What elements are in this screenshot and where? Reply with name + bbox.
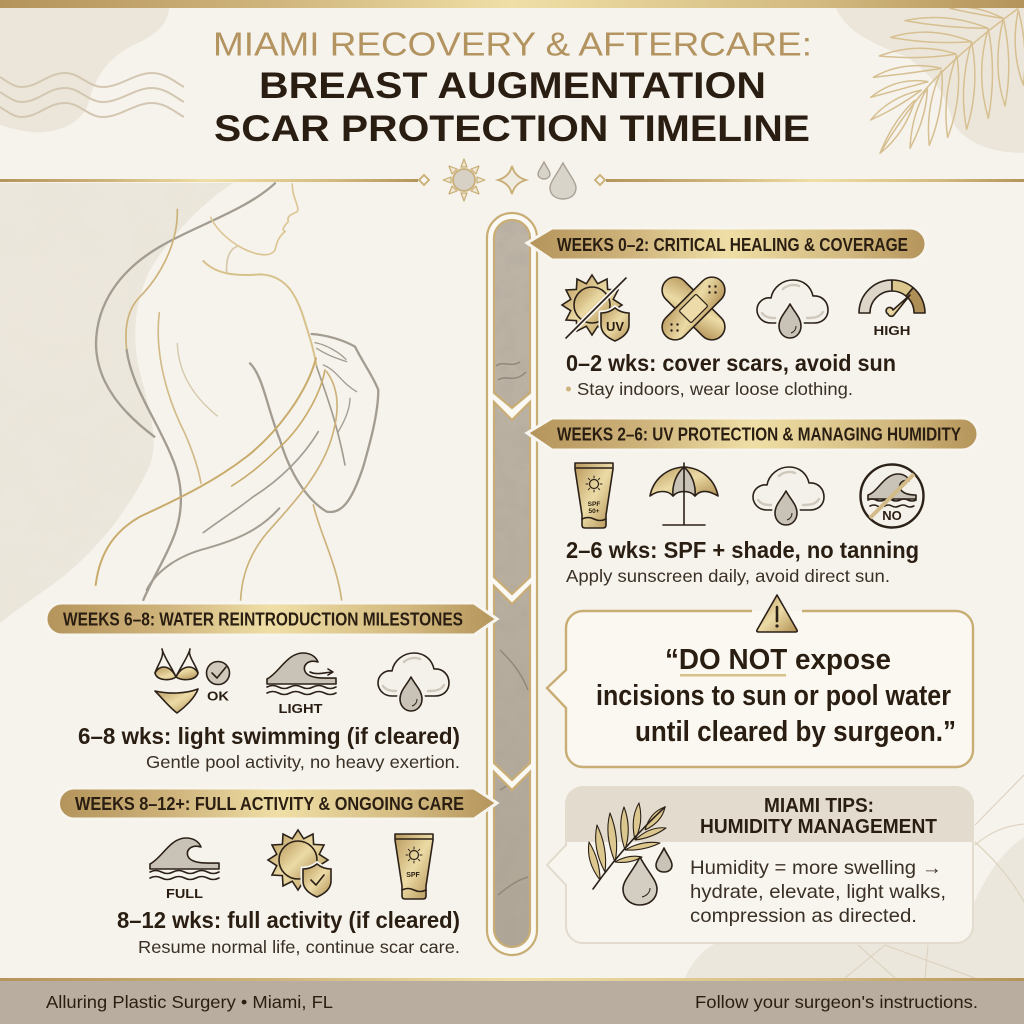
title: [213, 26, 812, 149]
icon: sunscreen tube SPF 50+: SPF: [588, 501, 600, 508]
icon: no tanning / no swimming: NO: [882, 508, 902, 523]
icon: sun with UV shield: [562, 275, 629, 341]
quote text: until cleared by surgeon.”: [635, 716, 956, 748]
banner: weeks 8-12: [58, 788, 497, 819]
bottom right background shape: [685, 775, 1024, 978]
tips text: compression as directed.: [690, 905, 917, 927]
top gold bar: [0, 0, 1024, 8]
icon: humidity cloud: [757, 280, 828, 338]
icon: no tanning / no swimming: [860, 464, 924, 528]
banner: weeks 2-6: WEEKS 2–6: UV PROTECTION & MANAGING HUMIDITY: [557, 424, 961, 444]
heading: Miami tips: HUMIDITY MANAGEMENT: [700, 816, 937, 838]
icon: bikini with OK check: [155, 649, 230, 713]
footer: [0, 978, 1024, 1024]
panel: weeks 6-8: [46, 603, 497, 772]
line art figure: [96, 183, 378, 600]
icon: high gauge: HIGH: [874, 323, 910, 338]
callout: surgeon warning: [547, 595, 973, 767]
panel: weeks 2-6: [527, 418, 978, 586]
heading: 2-6 weeks: 2–6 wks: SPF + shade, no tanning: [566, 537, 919, 563]
detail text: Resume normal life, continue scar care.: [138, 937, 460, 957]
title: SCAR PROTECTION TIMELINE: [214, 107, 810, 149]
left stone background shape: [0, 183, 240, 628]
banner: weeks 6-8: [46, 603, 497, 635]
footer text right: Follow your surgeon's instructions.: [695, 992, 978, 1012]
quote text: incisions to sun or pool water: [596, 680, 951, 712]
icon: full wave: FULL: [166, 886, 203, 901]
banner: weeks 6-8: WEEKS 6–8: WATER REINTRODUCTION MILESTONES: [63, 610, 463, 630]
heading: 0-2 weeks: 0–2 wks: cover scars, avoid sun: [566, 350, 896, 376]
banner: weeks 0-2: [527, 228, 926, 260]
icon: sun with UV shield: UV: [606, 319, 624, 334]
icon: bikini with OK check: OK: [207, 688, 230, 704]
detail text: Gentle pool activity, no heavy exertion.: [146, 752, 460, 772]
detail text: Apply sunscreen daily, avoid direct sun.: [566, 566, 890, 586]
header divider with ornaments: [0, 159, 1024, 201]
heading: 6-8 weeks: 6–8 wks: light swimming (if cleared): [78, 723, 460, 749]
icon: beach umbrella: [650, 463, 718, 525]
panel: weeks 8-12+: [58, 788, 497, 957]
icon: water drops: [538, 162, 576, 199]
vertical stone timeline: [487, 213, 537, 955]
tips text: Humidity = more swelling →: [690, 857, 942, 879]
banner: weeks 2-6: [527, 418, 978, 450]
icon: sunscreen tube SPF: [395, 834, 433, 899]
quote text: [596, 644, 956, 748]
header background blob left: [0, 8, 169, 132]
icon: light wave: [267, 653, 336, 716]
footer text left: Alluring Plastic Surgery • Miami, FL: [46, 992, 333, 1012]
heading: 8-12 weeks: 8–12 wks: full activity (if cleared): [117, 907, 460, 933]
title: MIAMI RECOVERY & AFTERCARE:: [213, 26, 812, 64]
decorative waves: [0, 73, 184, 117]
icon: crossed bandages: [657, 272, 730, 345]
header background blob right: [836, 8, 1024, 153]
icon: palm leaf with drops: [588, 803, 672, 905]
tips text: [690, 857, 946, 927]
quote text: “DO NOT expose: [665, 644, 891, 676]
icon: full wave: [150, 838, 219, 901]
tips text: hydrate, elevate, light walks,: [690, 881, 946, 903]
icon: sun with shield check: [268, 830, 331, 897]
palm frond illustration: [871, 7, 1024, 153]
icon: small sun: [443, 159, 485, 201]
icon: high gauge: [859, 280, 925, 338]
banner: weeks 0-2: WEEKS 0–2: CRITICAL HEALING & COVERAGE: [557, 235, 908, 255]
icon: sunscreen tube SPF: SPF: [406, 872, 421, 879]
banner: weeks 8-12: WEEKS 8–12+: FULL ACTIVITY & ONGOING CARE: [75, 794, 464, 814]
icon: sparkle: [498, 166, 526, 194]
bullet text: Stay indoors, wear loose clothing.: [577, 379, 853, 399]
panel: weeks 0-2: [527, 228, 926, 399]
icon: sunscreen tube SPF 50+: [575, 463, 613, 528]
icon: sunscreen tube SPF 50+: 50+: [588, 508, 600, 515]
heading: Miami tips: MIAMI TIPS:: [764, 795, 874, 817]
panel: Miami tips: [547, 787, 973, 943]
title: BREAST AUGMENTATION: [259, 64, 766, 106]
icon: warning triangle: [757, 595, 797, 632]
icon: humidity cloud: [753, 467, 824, 525]
icon: humidity cloud: [378, 653, 449, 711]
icon: light wave: LIGHT: [278, 701, 323, 716]
heading: Miami tips: [700, 795, 937, 838]
